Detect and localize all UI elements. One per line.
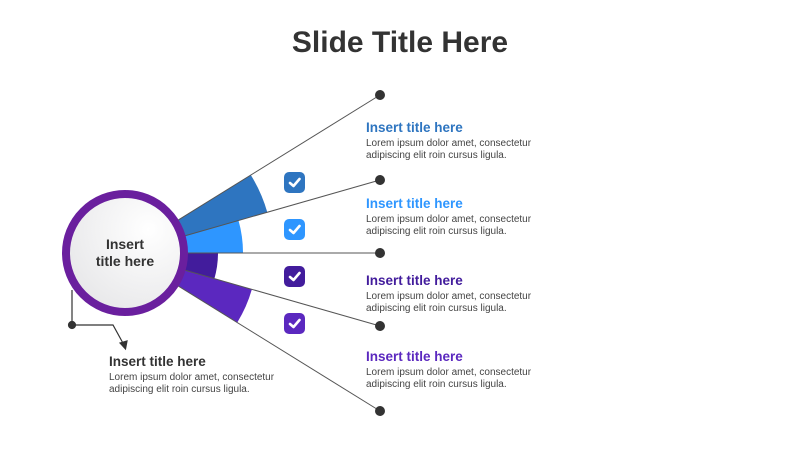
text block 1: Insert title here <box>366 120 463 135</box>
text block 3: Insert title here <box>366 273 463 288</box>
bottom-left text <box>109 354 275 395</box>
text block 2: Lorem ipsum dolor amet, consectetur <box>366 214 532 225</box>
text block 3 <box>366 273 532 314</box>
text block 3: adipiscing elit roin cursus ligula. <box>366 303 507 314</box>
text block 3: Lorem ipsum dolor amet, consectetur <box>366 291 532 302</box>
text block 4: Insert title here <box>366 349 463 364</box>
text block 2: Insert title here <box>366 196 463 211</box>
central circle: Insert <box>106 236 144 252</box>
central circle: title here <box>96 253 154 269</box>
check icons <box>284 172 305 334</box>
text block 2: adipiscing elit roin cursus ligula. <box>366 226 507 237</box>
text block 4: Lorem ipsum dolor amet, consectetur <box>366 367 532 378</box>
text block 1: adipiscing elit roin cursus ligula. <box>366 150 507 161</box>
connector lines <box>125 95 380 411</box>
text block 1 <box>366 120 532 161</box>
wedge 2 <box>125 220 243 253</box>
text block 2 <box>366 196 532 237</box>
bottom-left text: Insert title here <box>109 354 206 369</box>
wedge 3 <box>125 253 218 279</box>
central circle <box>66 194 184 312</box>
text block 4: adipiscing elit roin cursus ligula. <box>366 379 507 390</box>
callout arrow <box>68 290 127 349</box>
wedge 4 <box>125 253 252 323</box>
dots <box>375 90 385 416</box>
bottom-left text: adipiscing elit roin cursus ligula. <box>109 384 250 395</box>
text block 4 <box>366 349 532 390</box>
wedge 1 <box>125 175 267 253</box>
text block 1: Lorem ipsum dolor amet, consectetur <box>366 138 532 149</box>
title: Slide Title Here <box>292 26 508 59</box>
bottom-left text: Lorem ipsum dolor amet, consectetur <box>109 372 275 383</box>
